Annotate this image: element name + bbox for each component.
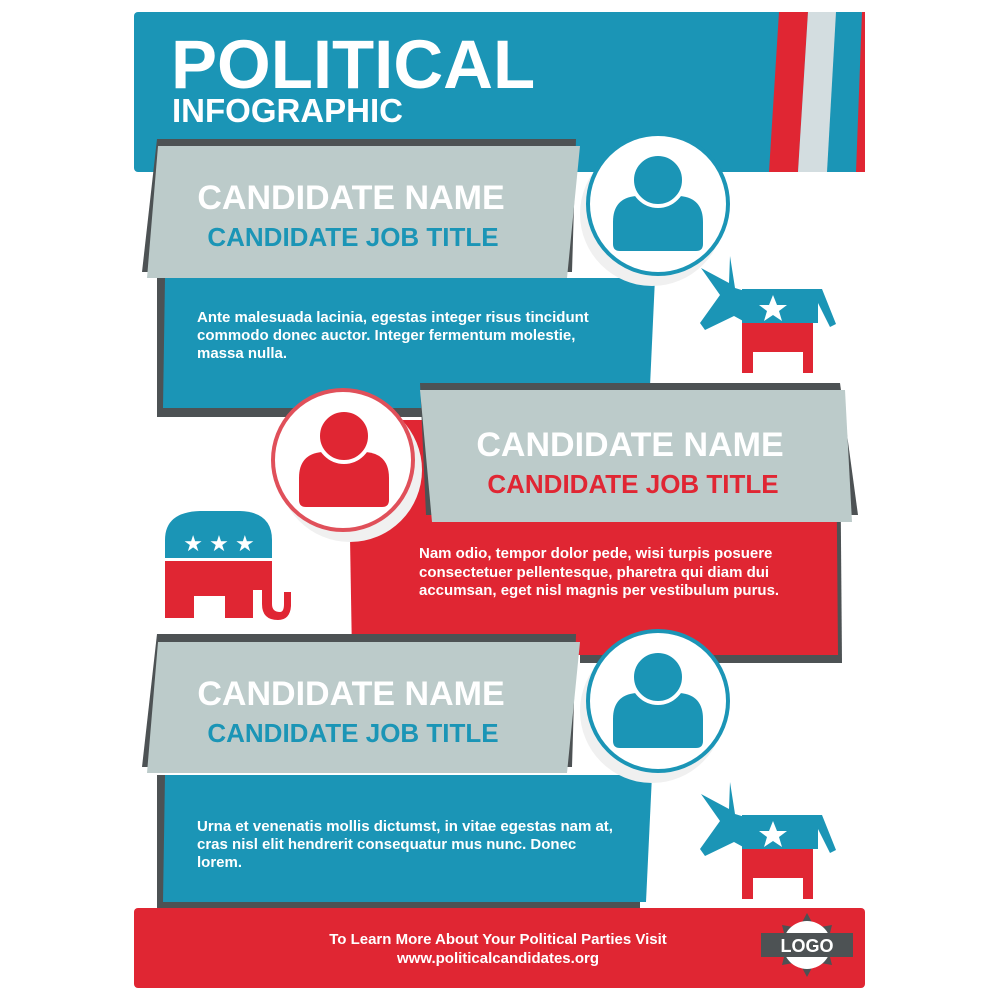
icon: elephant	[165, 511, 291, 620]
text 2: accumsan, eget nisl magnis per vestibulum purus.	[419, 582, 779, 599]
name 1: CANDIDATE NAME	[197, 179, 505, 217]
logo badge: LOGO	[780, 936, 834, 956]
text 3: cras nisl elit hendrerit consequatur mus nunc. Donec	[197, 836, 576, 853]
name 3: CANDIDATE NAME	[197, 675, 505, 713]
panel: candidate 2	[348, 383, 858, 663]
logo badge	[761, 913, 853, 977]
header	[134, 12, 865, 172]
panel: candidate 3	[142, 634, 652, 913]
text 3: Urna et venenatis mollis dictumst, in vitae egestas nam at,	[197, 818, 613, 835]
text 1: Ante malesuada lacinia, egestas integer risus tincidunt	[197, 309, 589, 326]
icon: avatar 3	[580, 631, 728, 783]
job title 2: CANDIDATE JOB TITLE	[487, 469, 779, 499]
footer text: www.politicalcandidates.org	[396, 950, 599, 967]
text 1: massa nulla.	[197, 345, 287, 362]
icon: avatar 2	[273, 390, 422, 542]
icon: elephant: ★ ★ ★	[183, 531, 255, 556]
panel: candidate 1	[142, 139, 655, 417]
icon: donkey 2	[700, 782, 836, 900]
icon: avatar 1	[580, 134, 728, 286]
subtitle: INFOGRAPHIC	[172, 92, 403, 129]
text 2: consectetuer pellentesque, pharetra qui diam dui	[419, 564, 769, 581]
footer	[134, 908, 865, 988]
footer text: To Learn More About Your Political Parties Visit	[329, 931, 667, 948]
icon: donkey 1	[700, 256, 836, 374]
text 2: Nam odio, tempor dolor pede, wisi turpis posuere	[419, 545, 772, 562]
job title 3: CANDIDATE JOB TITLE	[207, 718, 499, 748]
text 1: commodo donec auctor. Integer fermentum molestie,	[197, 327, 575, 344]
text 3: lorem.	[197, 854, 242, 871]
title: POLITICAL	[171, 26, 535, 103]
name 2: CANDIDATE NAME	[476, 426, 784, 464]
job title 1: CANDIDATE JOB TITLE	[207, 222, 499, 252]
